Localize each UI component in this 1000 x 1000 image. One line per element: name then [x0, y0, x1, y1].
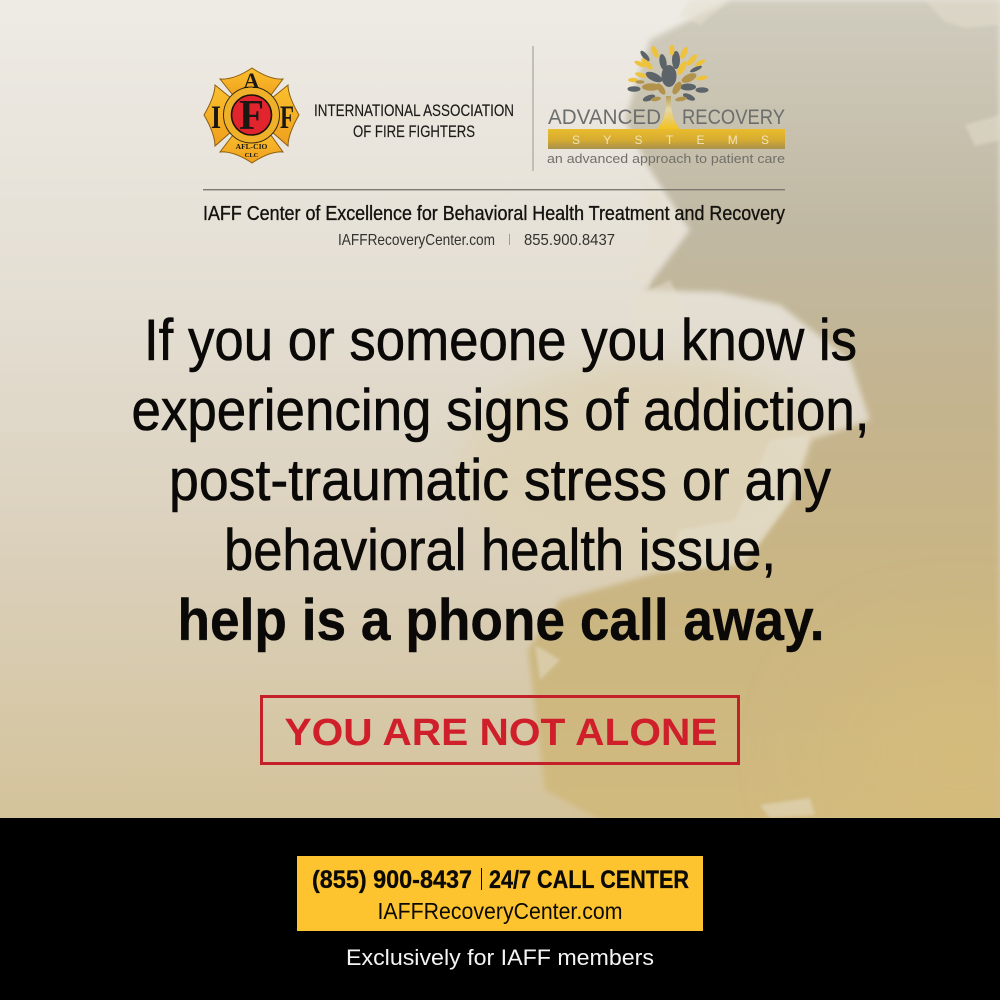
IAFF name: INTERNATIONAL ASSOCIATION: [314, 102, 514, 120]
IAFF logo: F: [239, 93, 264, 139]
contact line: IAFFRecoveryCenter.com: [338, 232, 495, 249]
footer band: [0, 818, 1000, 1000]
center title: IAFF Center of Excellence for Behavioral Health Treatment and Recovery: [203, 203, 785, 225]
IAFF logo: I: [211, 100, 221, 136]
IAFF logo: CLC: [245, 152, 259, 159]
callout: you are not alone: [262, 696, 738, 764]
contact box: (855) 900-8437: [312, 866, 472, 894]
logo divider: [532, 46, 534, 171]
tagline: an advanced approach to patient care: [547, 151, 785, 166]
main message: behavioral health issue,: [224, 518, 776, 583]
gold bar: [548, 129, 785, 149]
main message: If you or someone you know is: [144, 308, 857, 373]
main message: [132, 308, 870, 653]
call to action line: help is a phone call away.: [178, 588, 824, 653]
icon: tree: [628, 44, 708, 129]
Advanced Recovery Systems logo: SYSTEMS: [572, 133, 769, 147]
wordmark: ADVANCED: [548, 106, 661, 129]
IAFF logo: A: [244, 68, 260, 93]
IAFF name: [314, 102, 514, 141]
contact box: [297, 856, 703, 931]
footer note: Exclusively for IAFF members: [346, 945, 654, 970]
IAFF logo: AFL-CIO: [236, 142, 267, 151]
header rule: [203, 189, 785, 190]
Advanced Recovery Systems logo: RECOVERY: [682, 106, 785, 129]
contact line: [338, 232, 615, 249]
IAFF logo: [204, 68, 299, 163]
IAFF name: OF FIRE FIGHTERS: [353, 123, 475, 141]
main message: experiencing signs of addiction,: [132, 378, 870, 443]
main message: post-traumatic stress or any: [169, 448, 831, 513]
contact line: 855.900.8437: [524, 232, 615, 249]
contact box: IAFFRecoveryCenter.com: [378, 898, 622, 924]
contact box: 24/7 CALL CENTER: [489, 866, 689, 894]
Advanced Recovery Systems logo: [547, 44, 785, 166]
IAFF logo: F: [280, 100, 294, 136]
callout: you are not alone: YOU ARE NOT ALONE: [284, 712, 718, 754]
